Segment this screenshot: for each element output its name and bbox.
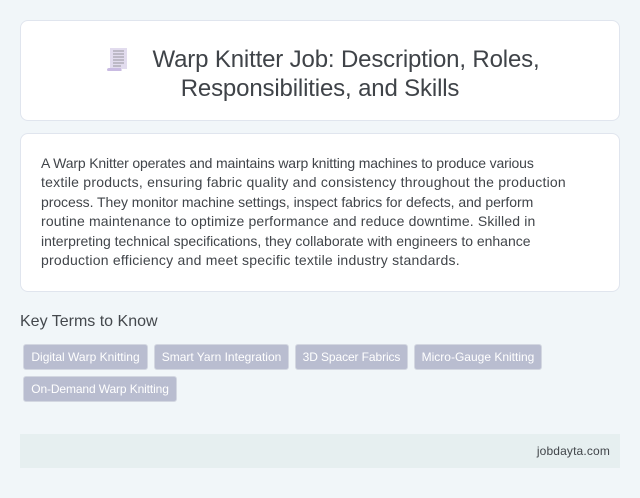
footer bar <box>20 434 620 468</box>
tag: On-Demand Warp Knitting <box>31 382 169 396</box>
title <box>152 46 540 102</box>
description text: production efficiency and meet specific textile industry standards. <box>41 252 460 268</box>
tag: Digital Warp Knitting <box>31 350 140 364</box>
panel: description <box>20 133 620 292</box>
description text: textile products, ensuring fabric quality and consistency throughout the production <box>41 174 566 190</box>
description text: interpreting technical specifications, they collaborate with engineers to enhance <box>41 233 530 249</box>
description text <box>41 155 566 268</box>
tag <box>23 344 148 370</box>
tag: Micro-Gauge Knitting <box>422 350 534 364</box>
description text: routine maintenance to optimize performance and reduce downtime. Skilled in <box>41 213 536 229</box>
tag: 3D Spacer Fabrics <box>303 350 400 364</box>
tag <box>295 344 408 370</box>
icon: document <box>107 48 127 71</box>
tag: Smart Yarn Integration <box>162 350 281 364</box>
panel: header <box>20 20 620 121</box>
footer source: jobdayta.com <box>537 444 610 458</box>
description text: process. They monitor machine settings, inspect fabrics for defects, and perform <box>41 194 533 210</box>
tag <box>414 344 542 370</box>
tag <box>23 376 177 402</box>
tag <box>154 344 289 370</box>
heading: key terms: Key Terms to Know <box>20 313 158 330</box>
title: Warp Knitter Job: Description, Roles, <box>152 46 540 73</box>
title: Responsibilities, and Skills <box>181 75 459 102</box>
description text: A Warp Knitter operates and maintains warp knitting machines to produce various <box>41 155 534 171</box>
